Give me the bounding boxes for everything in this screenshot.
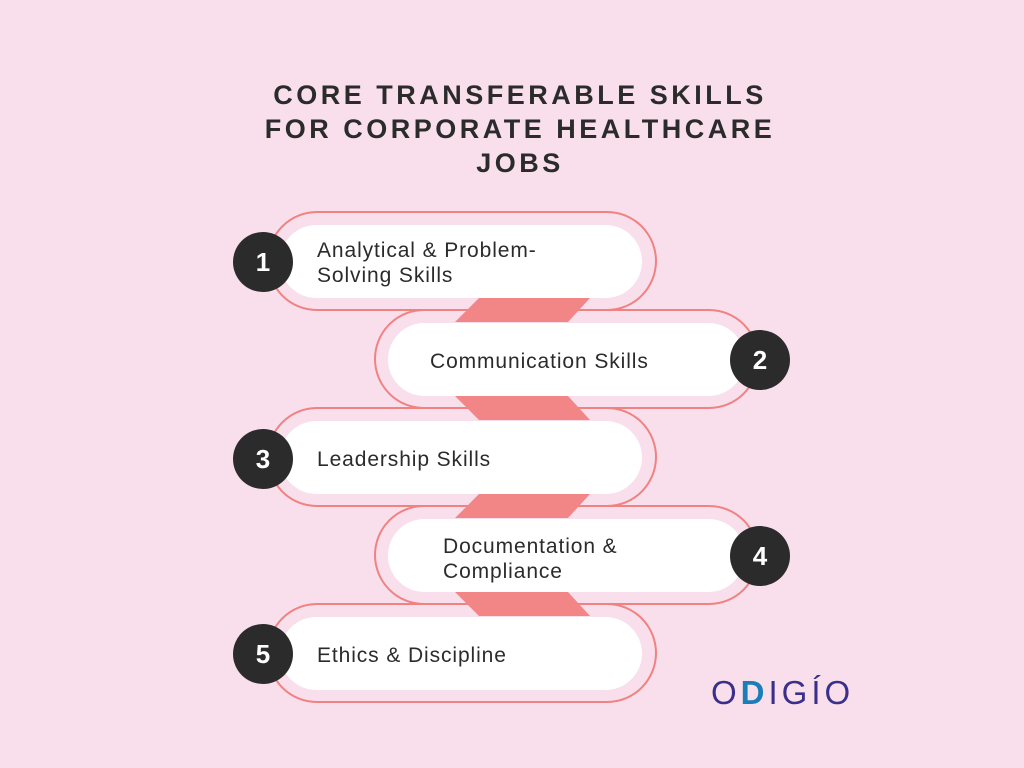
item 3: Leadership Skills — [317, 448, 491, 471]
title: CORE TRANSFERABLE SKILLS — [273, 80, 767, 110]
item 3 — [233, 421, 642, 494]
title: FOR CORPORATE HEALTHCARE — [265, 114, 775, 144]
item 2 — [388, 323, 790, 396]
item 5: Ethics & Discipline — [317, 644, 507, 667]
outlines — [268, 212, 758, 702]
title — [265, 80, 775, 178]
connectors — [455, 298, 590, 616]
item 1 — [233, 225, 642, 298]
item 5: 5 — [256, 639, 270, 669]
item 1: Analytical & Problem- — [317, 239, 537, 262]
item 4 — [388, 519, 790, 592]
item 2: 2 — [753, 345, 767, 375]
title: JOBS — [476, 148, 564, 178]
logo: ODIGÍO — [711, 674, 854, 711]
item 5 — [233, 617, 642, 690]
item 1: Solving Skills — [317, 264, 453, 287]
item 2: Communication Skills — [430, 350, 649, 373]
item 4: Documentation & — [443, 535, 618, 558]
item 3: 3 — [256, 444, 270, 474]
item 4: Compliance — [443, 560, 563, 583]
item 1: 1 — [256, 247, 270, 277]
item 4: 4 — [753, 541, 768, 571]
